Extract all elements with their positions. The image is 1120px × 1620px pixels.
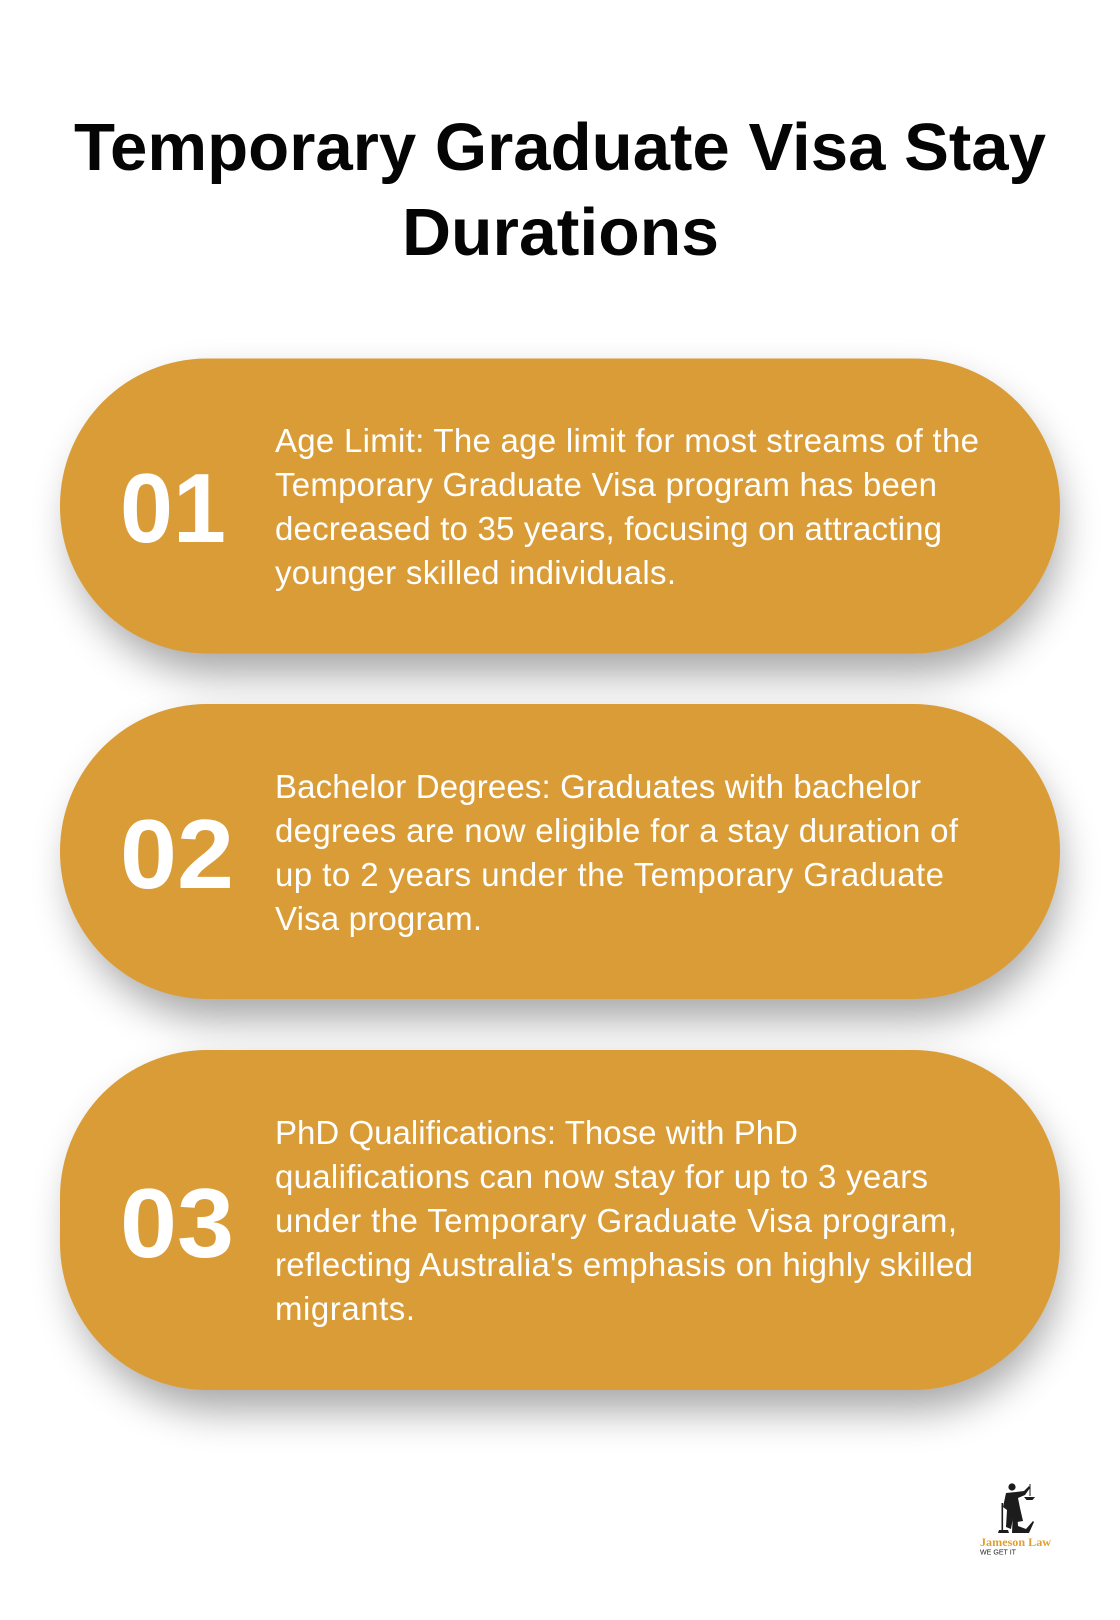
icon: lady justice <box>998 1483 1035 1533</box>
text: bachelor degrees <box>275 768 959 937</box>
logo tagline: WE GET IT <box>980 1550 1017 1556</box>
text: age limit: younger skilled individuals. <box>275 554 676 591</box>
number 03: 03 <box>120 1168 234 1278</box>
title: Durations <box>402 195 719 270</box>
text: age limit: Temporary Graduate Visa program has been <box>275 466 937 503</box>
panel: phd qualifications <box>60 1050 1060 1411</box>
logo name: Jameson Law <box>980 1537 1052 1549</box>
text: phd qualifications: under the Temporary Graduate Visa program, <box>275 1202 957 1239</box>
text: phd qualifications: qualifications can now stay for up to 3 years <box>275 1158 928 1195</box>
text: age limit: Age Limit: The age limit for most streams of the <box>275 422 979 459</box>
text: bachelor degrees: Visa program. <box>275 900 482 937</box>
text: phd qualifications: migrants. <box>275 1290 415 1327</box>
text: phd qualifications: PhD Qualifications: Those with PhD <box>275 1114 798 1151</box>
title <box>74 110 1046 270</box>
text: phd qualifications: reflecting Australia's emphasis on highly skilled <box>275 1246 973 1283</box>
text: age limit <box>275 422 979 591</box>
text: bachelor degrees: Bachelor Degrees: Graduates with bachelor <box>275 768 921 805</box>
number 02: 02 <box>120 799 234 909</box>
text: bachelor degrees: up to 2 years under the Temporary Graduate <box>275 856 944 893</box>
text: bachelor degrees: degrees are now eligible for a stay duration of <box>275 812 959 849</box>
logo: Jameson Law <box>980 1483 1052 1556</box>
panel: bachelor degrees <box>60 704 1060 1020</box>
panel: age limit <box>60 358 1060 675</box>
text: phd qualifications <box>275 1114 973 1327</box>
title: Temporary Graduate Visa Stay <box>74 110 1046 185</box>
number 01: 01 <box>120 453 226 563</box>
text: age limit: decreased to 35 years, focusing on attracting <box>275 510 942 547</box>
